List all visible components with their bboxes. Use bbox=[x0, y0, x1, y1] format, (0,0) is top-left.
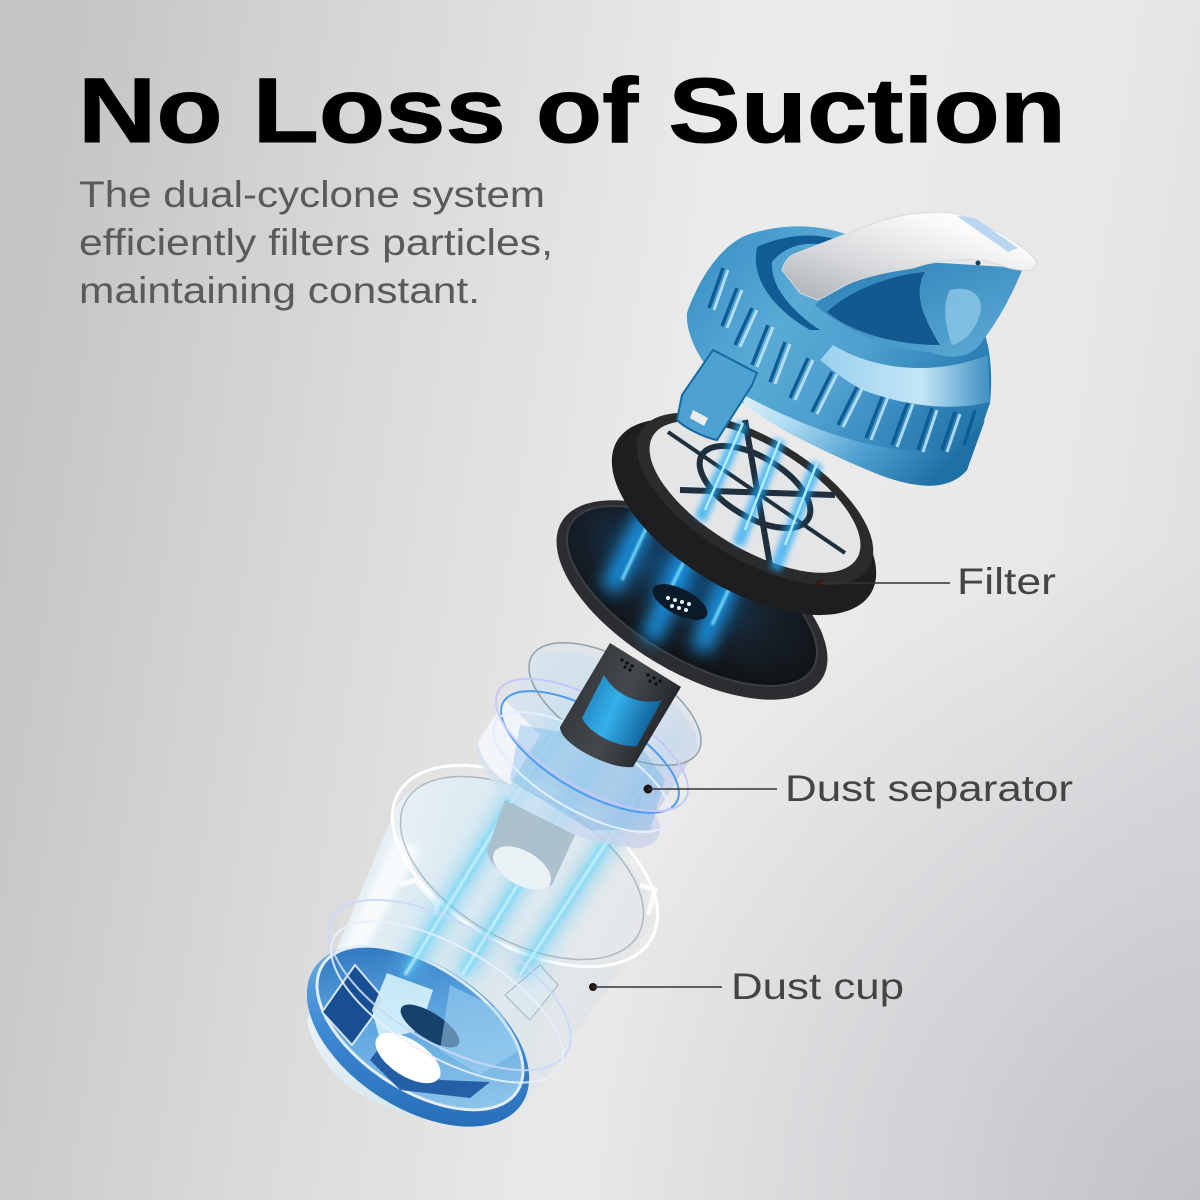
swirl rings bbox=[476, 653, 708, 855]
cup transparent wall bbox=[307, 778, 653, 1122]
air flow beams lower bbox=[405, 700, 680, 975]
lid rib wedges bbox=[709, 268, 975, 452]
lid top light band bbox=[820, 345, 990, 407]
label: dust separator bbox=[644, 768, 1073, 809]
cup left highlight bbox=[320, 835, 420, 1000]
label: dust cup: Dust cup bbox=[731, 966, 904, 1007]
description text: The dual-cyclone system bbox=[79, 174, 545, 215]
silver handle bbox=[782, 212, 1037, 300]
lid dark opening bbox=[827, 272, 940, 345]
filter mesh bbox=[626, 391, 884, 603]
filter bbox=[580, 378, 908, 655]
label: dust cup bbox=[589, 966, 904, 1007]
dust cup bbox=[275, 724, 691, 1164]
handle dot bbox=[976, 260, 980, 266]
description text: efficiently filters particles, bbox=[79, 222, 553, 263]
dark central tube bbox=[560, 643, 681, 767]
dust separator bbox=[476, 618, 720, 899]
separator body bbox=[478, 651, 698, 848]
label: filter: Filter bbox=[957, 561, 1056, 602]
filter gasket bbox=[580, 379, 908, 655]
lid top dark crescent bbox=[756, 235, 850, 330]
lower black ring bbox=[525, 460, 859, 740]
ring air holes bbox=[647, 577, 713, 627]
ring beams bbox=[610, 510, 745, 650]
cup blue base bbox=[275, 908, 561, 1164]
open clip bbox=[677, 350, 757, 440]
title: No Loss of Suction bbox=[78, 60, 1066, 162]
filter beams bbox=[700, 423, 817, 570]
handle blue button bbox=[957, 216, 1018, 252]
description text bbox=[79, 174, 553, 311]
lid lower skirt bbox=[738, 392, 985, 486]
separator top rim bbox=[510, 618, 720, 790]
swirl rings on cup bbox=[303, 866, 597, 1115]
cup rim bbox=[359, 724, 691, 1008]
tube window bbox=[582, 675, 662, 746]
inner gray cylinder bbox=[487, 800, 575, 886]
description text: maintaining constant. bbox=[79, 270, 480, 311]
blue lid bbox=[677, 212, 1037, 486]
label: dust separator: Dust separator bbox=[785, 768, 1073, 809]
separator left white band bbox=[478, 700, 540, 785]
neck highlight column bbox=[945, 289, 981, 345]
lid neck bbox=[815, 262, 1023, 357]
filter frame bbox=[668, 420, 845, 565]
lid silhouette bbox=[687, 226, 991, 486]
separator inner blue cone bbox=[510, 725, 665, 830]
label: filter bbox=[816, 561, 1056, 602]
tube mesh holes bbox=[620, 658, 662, 686]
